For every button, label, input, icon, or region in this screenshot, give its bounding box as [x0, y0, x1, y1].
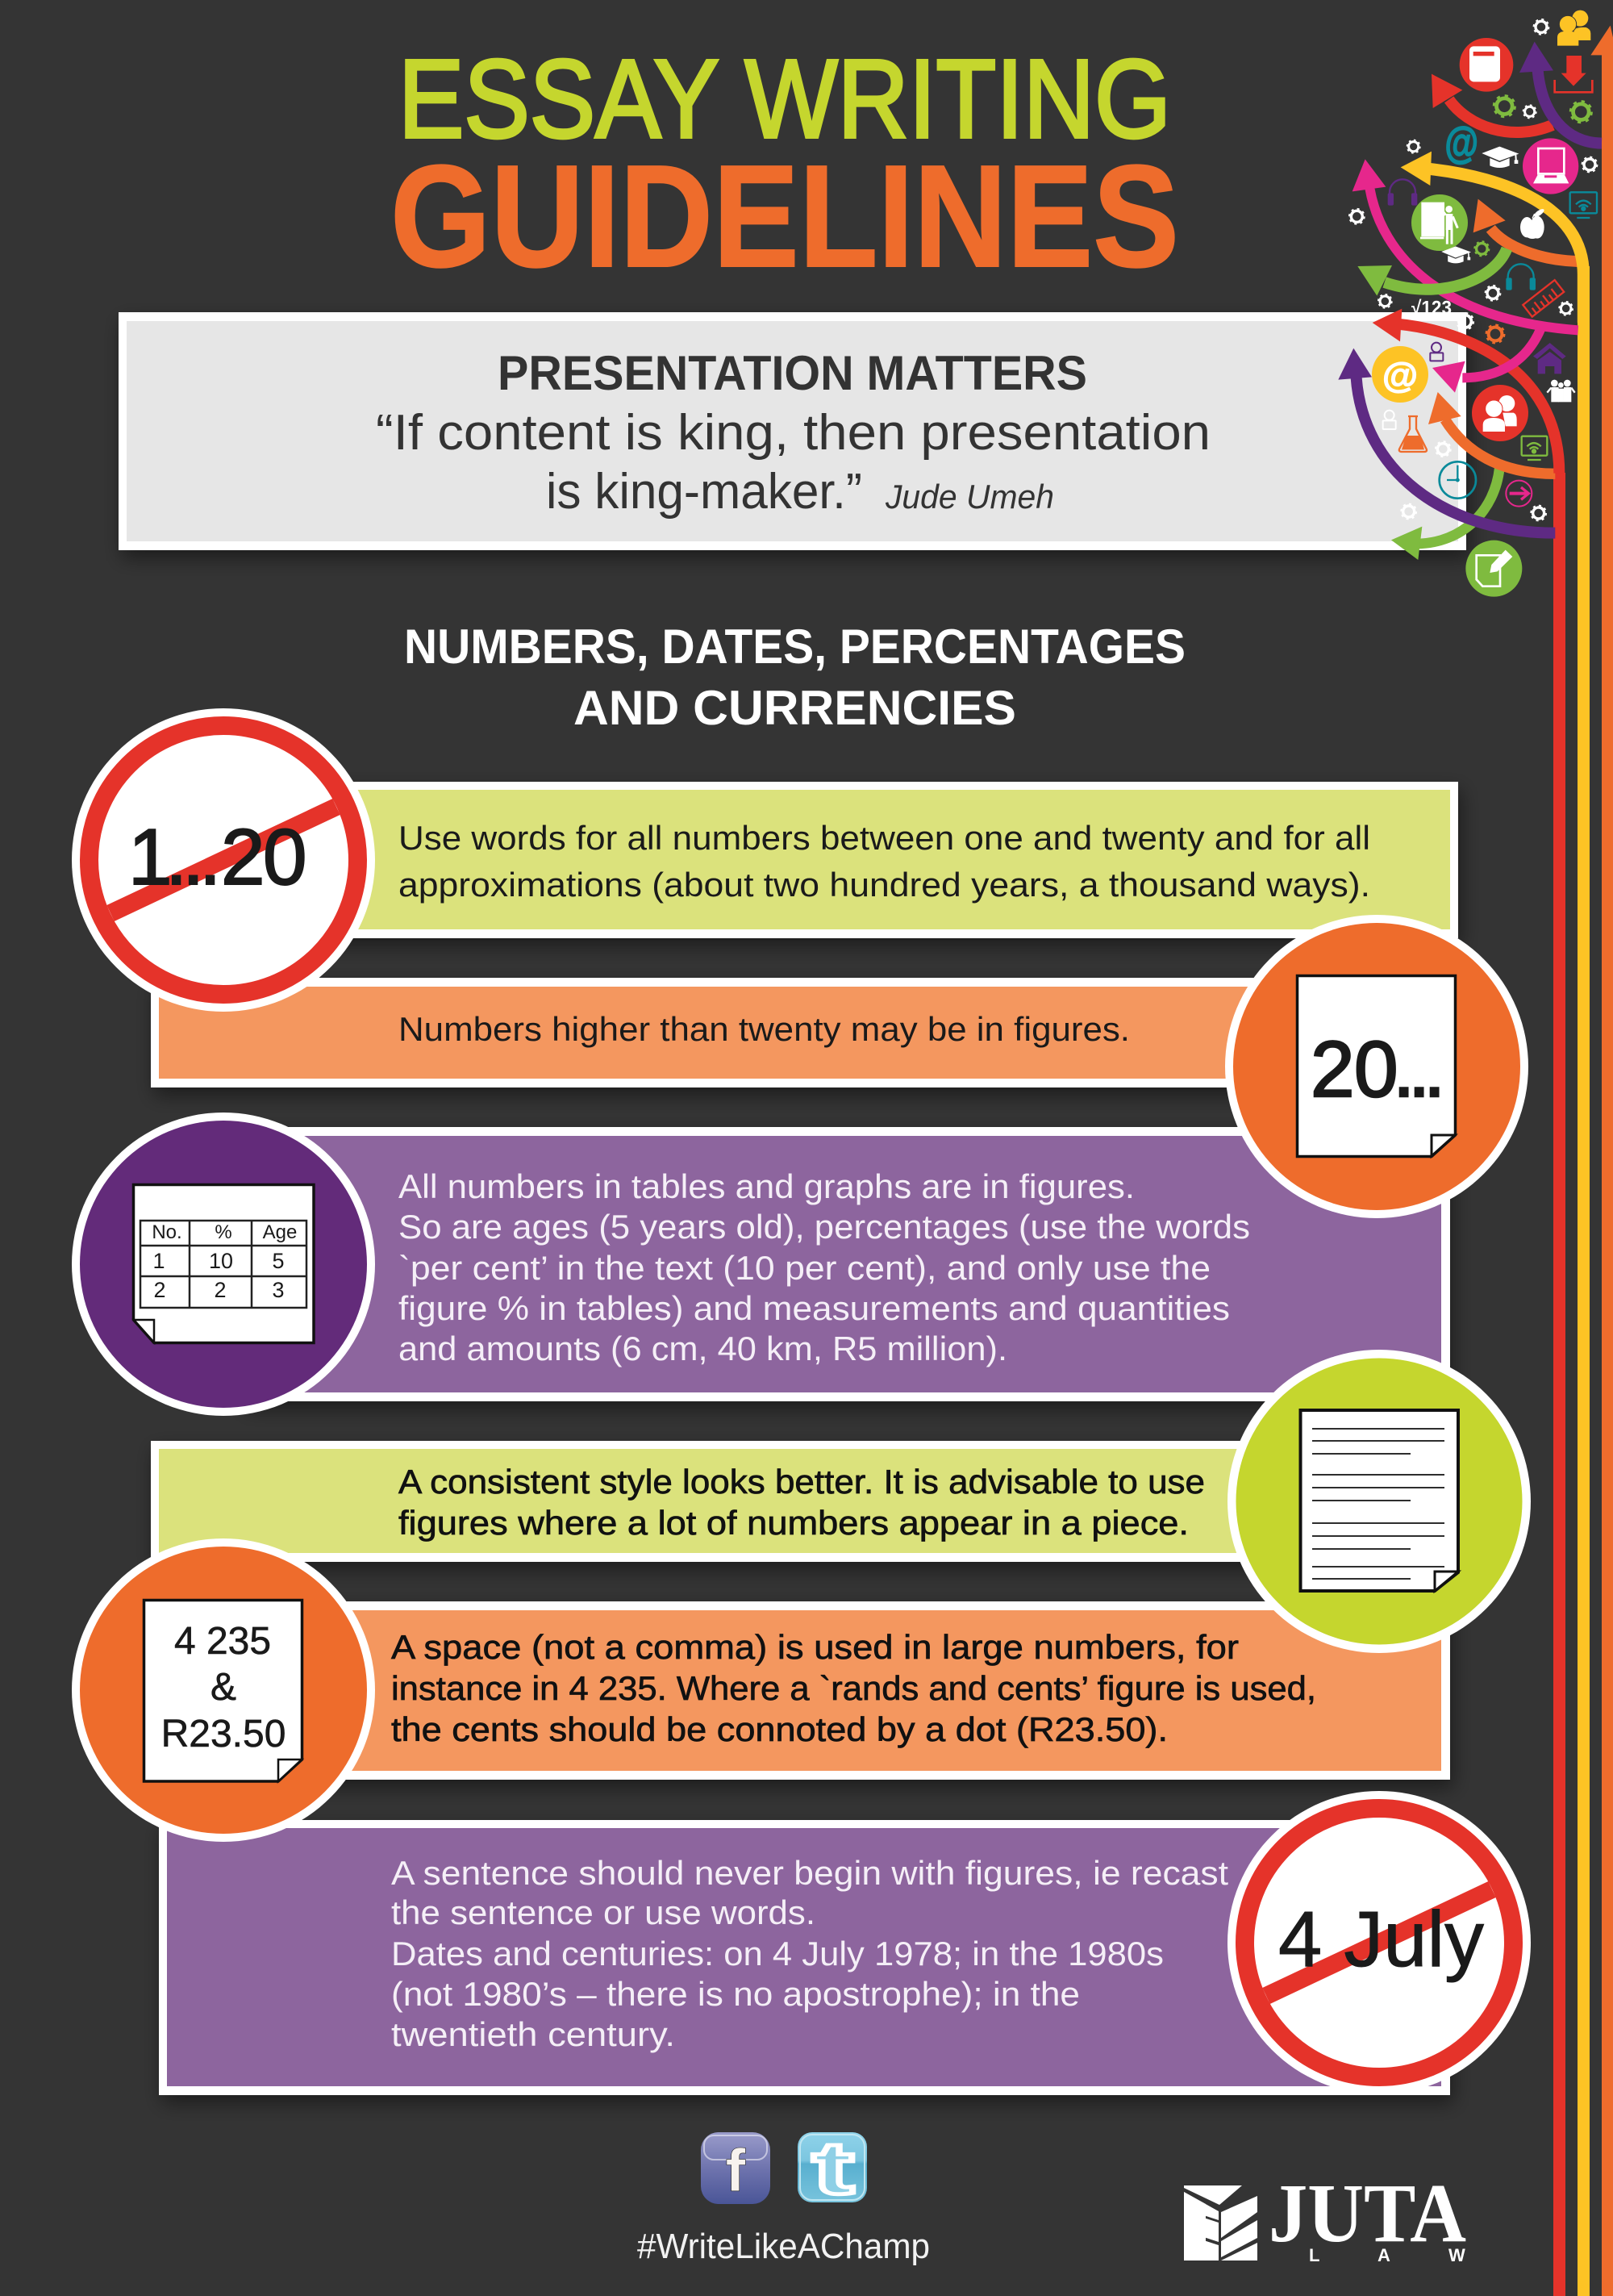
text: consistent style: figures where a lot of numbers appear in a piece. — [398, 1504, 1189, 1542]
arrow: green lower — [1391, 468, 1499, 560]
panel: sentences and dates — [159, 1820, 1450, 2095]
icon cluster: upper branches — [1349, 10, 1613, 330]
icon: green board circle — [1411, 194, 1468, 251]
mini table: 10 — [209, 1249, 233, 1273]
icon: square root label: √123 — [1411, 297, 1452, 319]
mini table: Age — [263, 1221, 297, 1243]
icon: gears lower — [1401, 313, 1546, 520]
arrow: orange stripe head — [1590, 26, 1613, 55]
text: higher numbers: Numbers higher than twenty may be in figures. — [398, 1010, 1130, 1048]
logo mark — [1184, 2185, 1257, 2261]
icon: graduation cap small — [1441, 246, 1471, 263]
badge: 20... document — [1225, 915, 1528, 1218]
text: tables and graphs: So are ages (5 years old), percentages (use the words — [398, 1208, 1250, 1246]
icon: user outlines — [1383, 343, 1443, 429]
icon: purple headphones — [1388, 179, 1417, 206]
text: use words: approximations (about two hundred years, a thousand ways). — [398, 866, 1370, 904]
text: consistent style — [398, 1463, 1205, 1542]
panel: consistent style — [151, 1441, 1361, 1562]
arrow: magenta lower — [1432, 329, 1540, 393]
icon: ruler — [1523, 280, 1564, 317]
heading: numbers, dates, percentages and currencies: AND CURRENCIES — [573, 681, 1016, 735]
badge: 4 235 and R23.50 document: 4 235 — [174, 1620, 271, 1663]
icon: green note circle — [1465, 541, 1522, 597]
badge: table document — [72, 1113, 375, 1416]
mini table — [140, 1221, 306, 1308]
arrow: purple lower — [1338, 349, 1555, 533]
panel: numbers higher than twenty — [151, 978, 1361, 1087]
icon: red book circle — [1460, 38, 1513, 92]
badge: 4 235 and R23.50 document — [72, 1538, 375, 1842]
badge: 20... document: 20... — [1311, 1025, 1445, 1113]
arrow: red curved — [1373, 309, 1559, 474]
text: sentences and dates: Dates and centuries: on 4 July 1978; in the 1980s — [391, 1935, 1164, 1972]
badge: no 1...20: 1...20 — [128, 812, 307, 901]
arrow: green left — [1357, 248, 1507, 296]
icon: facebook: f — [726, 2137, 746, 2204]
text: use words — [398, 819, 1370, 904]
arrow: orange middle — [1473, 199, 1578, 261]
icon: arrow circle — [1506, 481, 1532, 507]
text: sentences and dates: (not 1980’s – there is no apostrophe); in the — [391, 1975, 1080, 2013]
mini table: 1 — [152, 1249, 165, 1273]
badge: 4 235 and R23.50 document: & — [210, 1666, 236, 1709]
title line: essay writing: ESSAY WRITING — [398, 37, 1171, 161]
logo subtitle: A — [1378, 2245, 1390, 2265]
text: sentences and dates: twentieth century. — [391, 2015, 675, 2053]
logo wordmark: JUTA — [1269, 2167, 1466, 2260]
badge: no 1...20 — [72, 708, 375, 1012]
icon: download — [1555, 56, 1592, 92]
text: space not comma: A space (not a comma) is used in large numbers, for — [391, 1628, 1239, 1666]
text: sentences and dates: A sentence should never begin with figures, ie recast — [391, 1854, 1228, 1892]
arrow: purple upper — [1519, 42, 1602, 144]
arrow: yellow — [1401, 152, 1583, 323]
text: tables and graphs: All numbers in tables and graphs are in figures. — [398, 1167, 1135, 1205]
panel: presentation matters — [119, 312, 1466, 550]
icon: apple — [1520, 207, 1545, 239]
badge: 4 235 and R23.50 document: R23.50 — [161, 1713, 286, 1755]
mini table: % — [215, 1221, 232, 1243]
heading: numbers, dates, percentages and currencies — [404, 620, 1186, 735]
icon: facebook — [701, 2132, 770, 2204]
logo subtitle: W — [1448, 2245, 1465, 2265]
arrow: magenta left — [1353, 159, 1578, 330]
icon: group of users — [1557, 10, 1590, 46]
logo: juta law — [1184, 2167, 1466, 2265]
text: tables and graphs — [398, 1167, 1250, 1367]
icon: twitter: t — [812, 2127, 854, 2210]
mini table: 3 — [272, 1278, 285, 1302]
quote text: “If content is king, then presentation — [376, 405, 1211, 461]
heading: numbers, dates, percentages and currencies: NUMBERS, DATES, PERCENTAGES — [404, 620, 1186, 674]
icon: flask — [1399, 416, 1427, 452]
icon: pink laptop circle — [1523, 138, 1578, 194]
right-hand vertical stripes — [1553, 55, 1613, 2296]
icon: green monitor — [1522, 436, 1547, 460]
title — [390, 37, 1179, 298]
heading: presentation matters: PRESENTATION MATTERS — [498, 346, 1087, 400]
quote text: is king-maker.” — [546, 464, 862, 520]
logo subtitle: L — [1309, 2245, 1319, 2265]
badge: no 4 July: 4 July — [1278, 1895, 1484, 1983]
text: space not comma: instance in 4 235. Where a `rands and cents’ figure is used, — [391, 1669, 1316, 1707]
mini table: 2 — [153, 1278, 166, 1302]
quote text — [376, 405, 1211, 520]
arrow: orange lower — [1428, 392, 1555, 474]
mini table: 5 — [272, 1249, 285, 1273]
hashtag: #WriteLikeAChamp — [637, 2227, 930, 2266]
title line: guidelines: GUIDELINES — [390, 136, 1179, 298]
panel: numbers one to twenty — [242, 782, 1458, 938]
text: sentences and dates: the sentence or use words. — [391, 1893, 815, 1931]
text: tables and graphs: `per cent’ in the text (10 per cent), and only use the — [398, 1249, 1211, 1287]
logo subtitle — [1309, 2245, 1465, 2265]
text: space not comma — [391, 1628, 1316, 1748]
icon: yellow at circle — [1372, 346, 1428, 403]
icon: white gears — [1349, 19, 1597, 315]
icon: yellow at circle: @ — [1382, 357, 1418, 395]
icon: clock — [1440, 461, 1476, 499]
mini table: No. — [152, 1221, 182, 1243]
text: space not comma: the cents should be connoted by a dot (R23.50). — [391, 1710, 1168, 1748]
mini table: 2 — [214, 1278, 227, 1302]
text: consistent style: A consistent style looks better. It is advisable to use — [398, 1463, 1205, 1501]
icon: teal at sign: @ — [1444, 119, 1478, 167]
icon: red users circle — [1472, 385, 1528, 441]
icon: teal headphones — [1506, 264, 1536, 290]
text: tables and graphs: and amounts (6 cm, 40 km, R5 million). — [398, 1330, 1007, 1367]
panel: tables and figures — [242, 1127, 1450, 1401]
icon: purple house — [1533, 343, 1566, 374]
icon: family — [1547, 380, 1575, 402]
icon: twitter — [798, 2127, 867, 2210]
badge: no 4 July — [1227, 1791, 1531, 2094]
text: use words: Use words for all numbers between one and twenty and for all — [398, 819, 1370, 857]
icon: green gears — [1474, 96, 1591, 256]
icon cluster: lower branches — [1338, 309, 1575, 597]
arrow: red upper — [1432, 74, 1553, 132]
panel: space in large numbers — [242, 1601, 1450, 1780]
icon: teal monitor — [1570, 192, 1597, 218]
badge: text document — [1227, 1350, 1531, 1653]
text: tables and graphs: figure % in tables) and measurements and quantities — [398, 1289, 1230, 1327]
text: sentences and dates — [391, 1854, 1228, 2053]
icon: graduation cap — [1482, 147, 1519, 168]
quote text: Jude Umeh — [885, 478, 1054, 516]
